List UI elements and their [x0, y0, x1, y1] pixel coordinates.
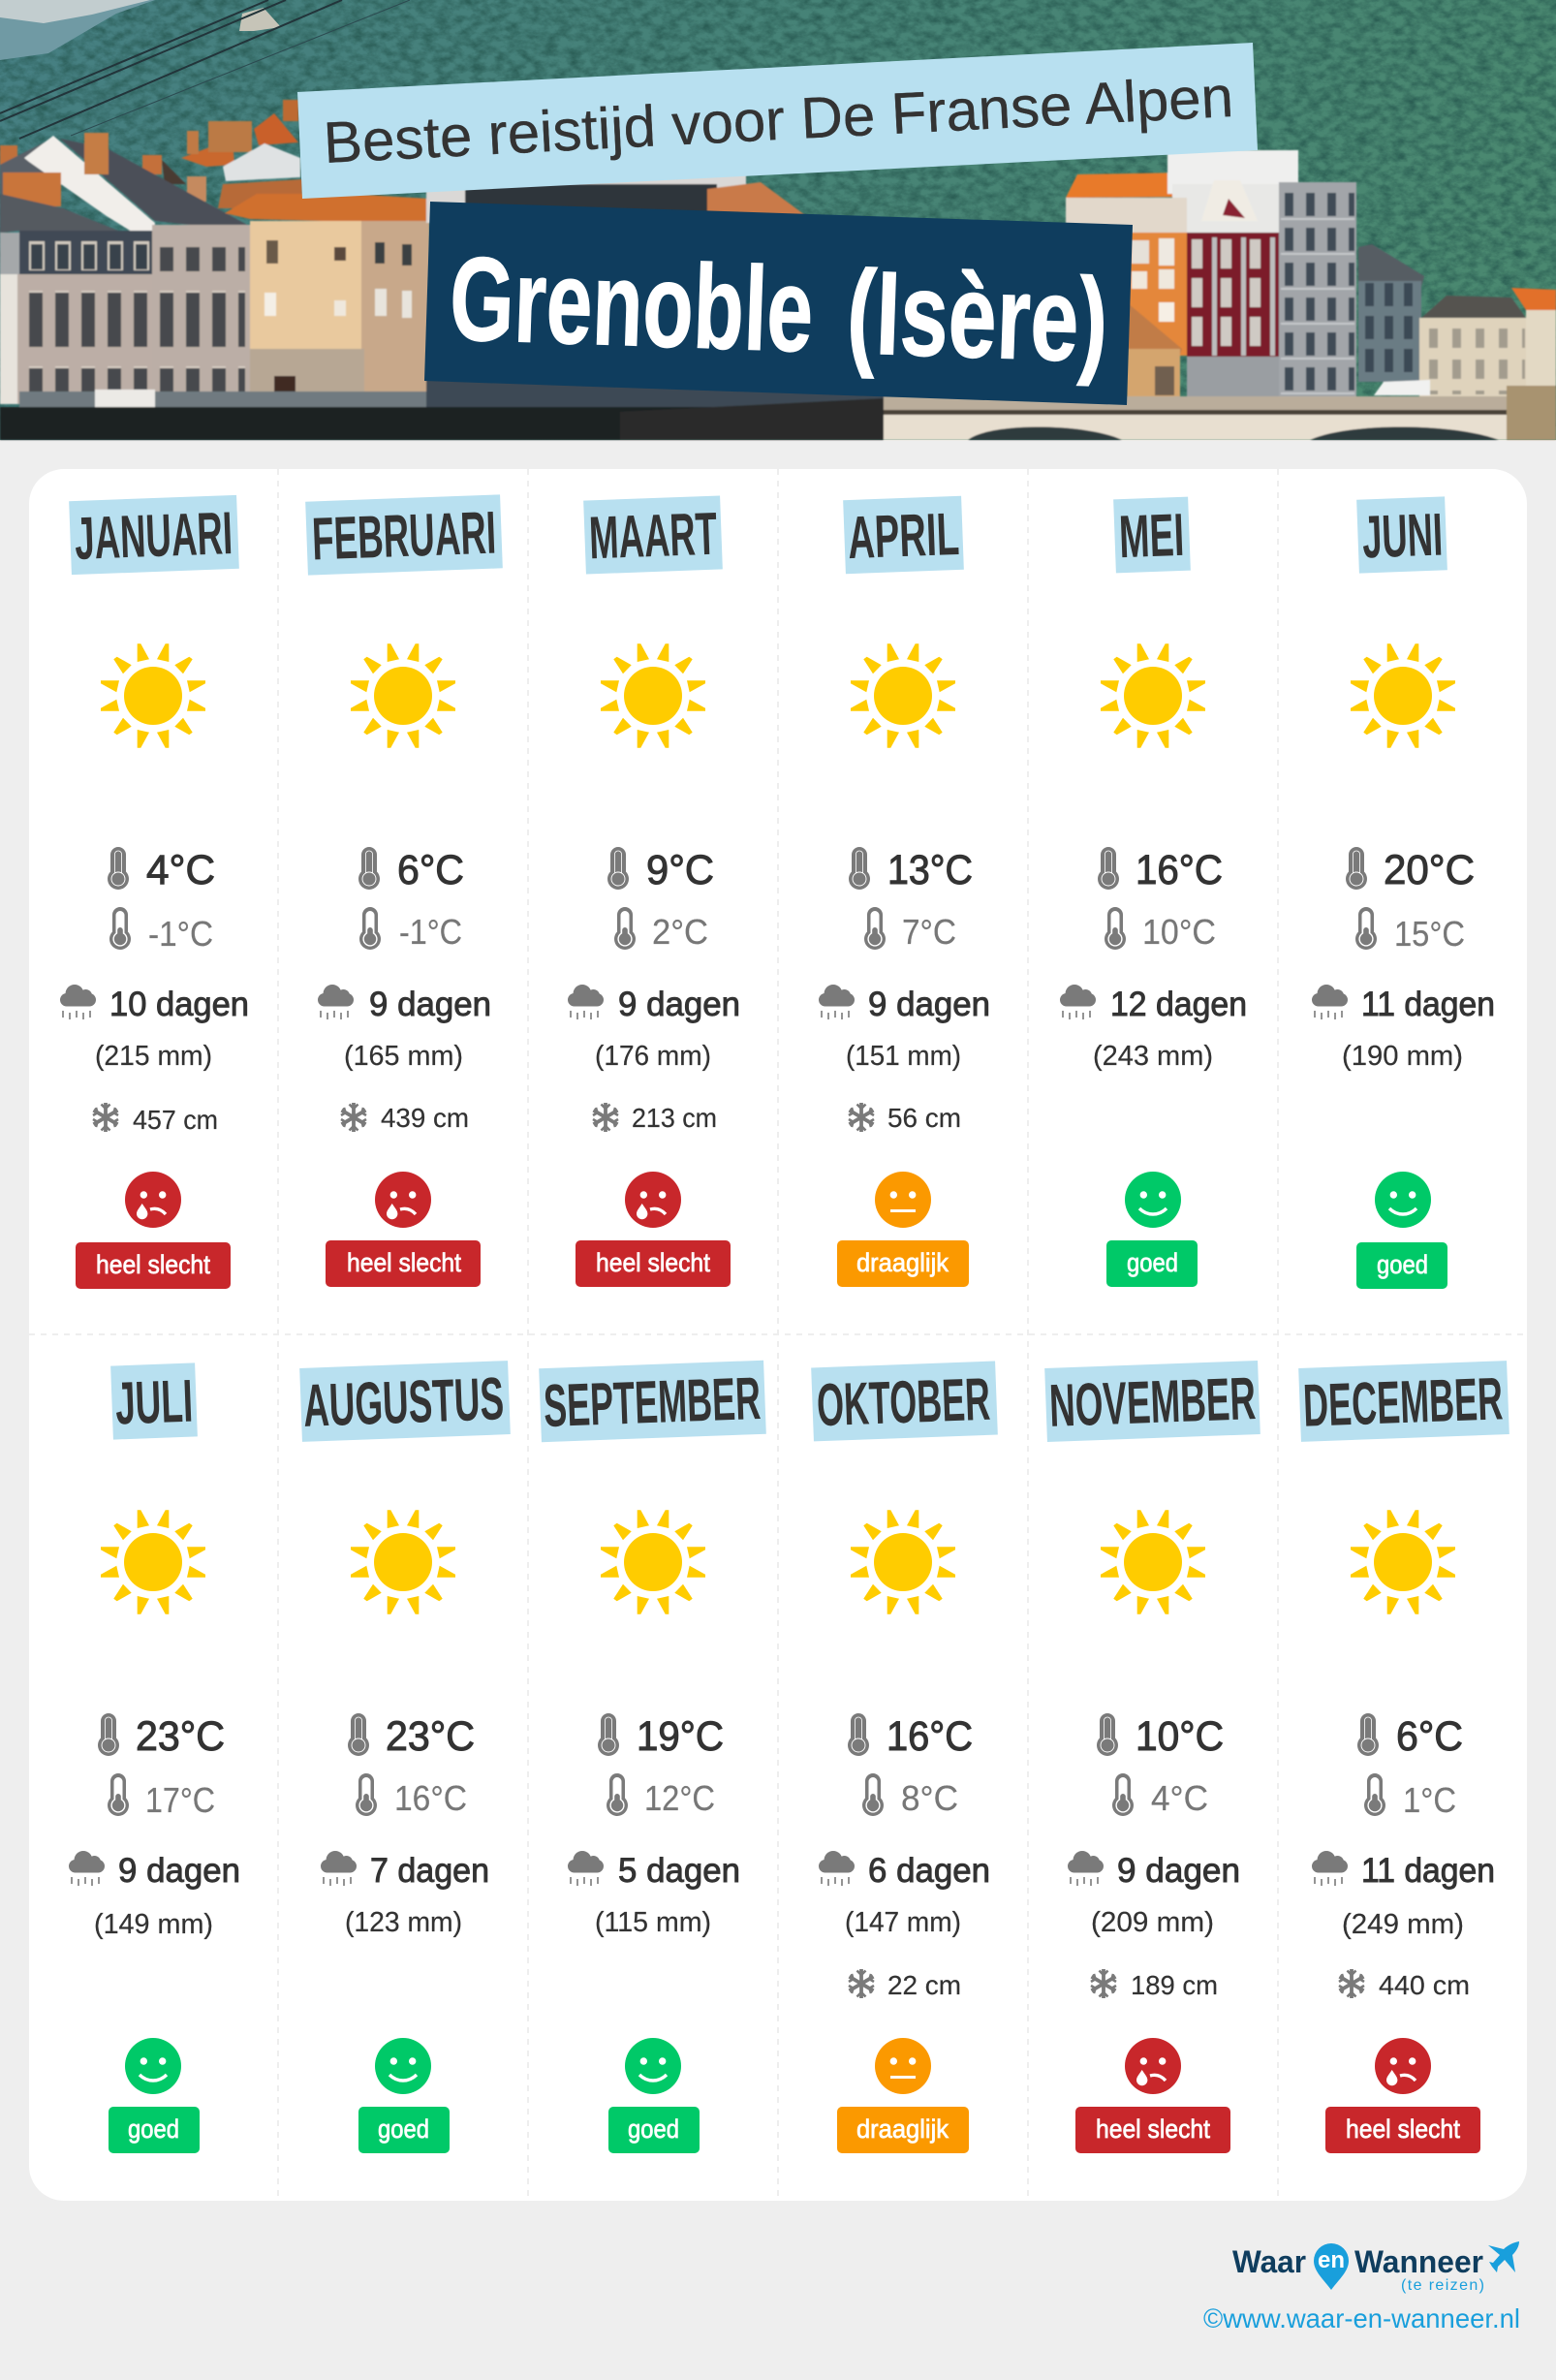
icon: sun — [1351, 643, 1455, 748]
month: mei — [1060, 497, 1247, 1287]
icon: rain cloud — [1312, 985, 1348, 1019]
logo: Waar en Wanneer: en — [1318, 2247, 1345, 2273]
max temperature: 6°C — [1396, 1713, 1463, 1760]
icon: rain cloud — [1060, 985, 1096, 1019]
rating badge: heel slecht — [596, 1248, 710, 1277]
icon: sun — [101, 1510, 205, 1614]
rating badge — [576, 1240, 731, 1287]
rating badge — [1356, 1242, 1447, 1289]
rating badge — [837, 2107, 969, 2153]
icon: sun — [1351, 1510, 1455, 1614]
rain days: 11 dagen — [1361, 986, 1495, 1023]
icon: neutral face — [875, 1172, 931, 1228]
snowfall: 22 cm — [887, 1970, 961, 2000]
rain days: 11 dagen — [1361, 1852, 1495, 1890]
icon: thermometer min — [1355, 907, 1377, 950]
snowfall: 439 cm — [381, 1103, 469, 1133]
rating badge — [109, 2107, 200, 2153]
heading: juli — [110, 1362, 198, 1440]
icon: map pin — [1314, 2243, 1349, 2290]
rating badge: goed — [128, 2114, 179, 2144]
icon: crying face — [1375, 2038, 1431, 2094]
icon: happy face — [625, 2038, 681, 2094]
heading: april: APRIL — [847, 501, 960, 572]
icon: rain cloud — [60, 985, 96, 1019]
heading: februari: FEBRUARI — [311, 500, 497, 573]
rating badge: heel slecht — [1346, 2114, 1460, 2144]
rainfall: (243 mm) — [1093, 1041, 1213, 1072]
rain days: 7 dagen — [370, 1852, 489, 1890]
rain days: 10 dagen — [109, 986, 249, 1023]
max temperature: 13°C — [887, 847, 973, 893]
heading: maart: MAART — [588, 501, 718, 572]
snowfall: 213 cm — [632, 1103, 717, 1133]
icon: crying face — [625, 1172, 681, 1228]
heading: november — [1044, 1361, 1260, 1442]
rainfall: (249 mm) — [1342, 1909, 1464, 1940]
max temperature: 4°C — [146, 847, 215, 893]
min temperature: 17°C — [145, 1780, 215, 1820]
icon: sun — [851, 643, 955, 748]
heading: juni — [1356, 496, 1447, 574]
min temperature: 15°C — [1394, 914, 1465, 954]
rainfall: (176 mm) — [595, 1041, 711, 1072]
icon: thermometer max — [1098, 847, 1119, 890]
logo: Waar en Wanneer: (te reizen) — [1401, 2277, 1484, 2294]
snowfall: 457 cm — [133, 1105, 218, 1135]
heading: september: SEPTEMBER — [543, 1365, 762, 1440]
heading: mei: MEI — [1118, 502, 1185, 571]
rating badge: goed — [628, 2114, 679, 2144]
icon: thermometer max — [598, 1713, 619, 1756]
snowfall: 56 cm — [887, 1103, 961, 1133]
icon: sun — [601, 1510, 705, 1614]
heading: juli: JULI — [114, 1368, 194, 1437]
icon: snowflake — [341, 1103, 366, 1132]
heading: november: NOVEMBER — [1048, 1365, 1257, 1440]
icon: sun — [601, 643, 705, 748]
icon: sun — [851, 1510, 955, 1614]
heading: augustus: AUGUSTUS — [302, 1365, 505, 1440]
logo: Waar en Wanneer: Wanneer — [1354, 2244, 1483, 2279]
icon: sun — [1101, 1510, 1205, 1614]
heading: oktober: OKTOBER — [816, 1366, 991, 1439]
heading: juni: JUNI — [1361, 501, 1444, 571]
icon: thermometer min — [109, 907, 131, 950]
icon: thermometer max — [1097, 1713, 1118, 1756]
rain days: 12 dagen — [1110, 986, 1247, 1023]
max temperature: 16°C — [1136, 847, 1223, 893]
icon: thermometer min — [614, 907, 636, 950]
icon: happy face — [375, 2038, 431, 2094]
rating badge — [837, 1240, 969, 1287]
rainfall: (123 mm) — [345, 1907, 462, 1938]
max temperature: 23°C — [136, 1713, 225, 1760]
title banner: Beste reistijd voor De Franse Alpen — [297, 43, 1258, 199]
heading: oktober — [811, 1362, 998, 1441]
icon: thermometer min — [1112, 1773, 1134, 1816]
panel: monthly climate card — [29, 469, 1527, 2201]
icon: thermometer max — [848, 1713, 869, 1756]
min temperature: 10°C — [1142, 912, 1216, 952]
heading: maart — [583, 495, 723, 575]
rating badge — [608, 2107, 700, 2153]
icon: thermometer max — [1346, 847, 1367, 890]
month: oktober — [811, 1362, 998, 2153]
rainfall: (149 mm) — [94, 1909, 213, 1940]
month: januari — [60, 495, 249, 1289]
month: september — [539, 1361, 766, 2153]
logo: Waar en Wanneer — [1232, 2241, 1519, 2294]
icon: thermometer max — [348, 1713, 369, 1756]
min temperature: 12°C — [644, 1778, 715, 1818]
snowfall: 440 cm — [1379, 1970, 1470, 2000]
icon: snowflake — [1091, 1969, 1116, 1998]
icon: thermometer min — [356, 1773, 377, 1816]
icon: thermometer min — [108, 1773, 129, 1816]
rating badge — [1075, 2107, 1230, 2153]
icon: thermometer min — [359, 907, 381, 950]
icon: snowflake — [849, 1969, 874, 1998]
icon: thermometer max — [98, 1713, 119, 1756]
rainfall: (147 mm) — [845, 1907, 961, 1938]
icon: thermometer max — [607, 847, 629, 890]
rain days: 9 dagen — [868, 986, 990, 1023]
min temperature: -1°C — [148, 914, 213, 954]
min temperature: 7°C — [902, 912, 956, 952]
icon: rain cloud — [1312, 1851, 1348, 1886]
heading banner: Grenoble (Isère) — [424, 202, 1133, 405]
rain days: 9 dagen — [1117, 1852, 1240, 1890]
icon: rain cloud — [321, 1851, 357, 1886]
rainfall: (209 mm) — [1091, 1907, 1214, 1938]
icon: thermometer min — [607, 1773, 628, 1816]
max temperature: 19°C — [637, 1713, 724, 1760]
rainfall: (115 mm) — [595, 1907, 711, 1938]
rating badge: heel slecht — [347, 1248, 461, 1277]
icon: crying face — [1125, 2038, 1181, 2094]
icon: airplane — [1488, 2241, 1519, 2272]
icon: rain cloud — [69, 1851, 105, 1886]
icon: sun — [351, 643, 455, 748]
icon: thermometer min — [864, 907, 886, 950]
logo: Waar en Wanneer: Waar — [1232, 2244, 1306, 2279]
icon: thermometer min — [1105, 907, 1126, 950]
max temperature: 10°C — [1136, 1713, 1224, 1760]
icon: snowflake — [1339, 1969, 1364, 1998]
icon: rain cloud — [568, 1851, 604, 1886]
icon: rain cloud — [568, 985, 604, 1019]
heading: januari: JANUARI — [74, 500, 233, 573]
icon: sun — [101, 643, 205, 748]
icon: snowflake — [593, 1103, 618, 1132]
rating badge: goed — [1377, 1250, 1428, 1279]
icon: crying face — [125, 1172, 181, 1228]
icon: rain cloud — [1068, 1851, 1104, 1886]
icon: happy face — [125, 2038, 181, 2094]
max temperature: 16°C — [887, 1713, 973, 1760]
icon: rain cloud — [819, 985, 855, 1019]
heading: februari — [305, 494, 503, 576]
website url: ©www.waar-en-wanneer.nl — [1203, 2303, 1520, 2333]
icon: sun — [351, 1510, 455, 1614]
icon: happy face — [1375, 1172, 1431, 1228]
max temperature: 6°C — [397, 847, 464, 893]
icon: neutral face — [875, 2038, 931, 2094]
icon: crying face — [375, 1172, 431, 1228]
rating badge: goed — [1127, 1248, 1178, 1277]
rainfall: (215 mm) — [95, 1041, 212, 1072]
icon: rain cloud — [819, 1851, 855, 1886]
rating badge — [1325, 2107, 1480, 2153]
rating badge — [358, 2107, 450, 2153]
min temperature: 2°C — [652, 912, 708, 952]
min temperature: 8°C — [901, 1778, 958, 1818]
icon: thermometer max — [849, 847, 870, 890]
month: juli — [69, 1362, 240, 2153]
icon: thermometer min — [1364, 1773, 1385, 1816]
icon: thermometer max — [1357, 1713, 1379, 1756]
max temperature: 20°C — [1384, 847, 1475, 893]
icon: sun — [1101, 643, 1205, 748]
icon: snowflake — [93, 1103, 118, 1132]
rainfall: (151 mm) — [846, 1041, 961, 1072]
rating badge: heel slecht — [96, 1250, 210, 1279]
min temperature: 4°C — [1151, 1778, 1208, 1818]
heading: augustus — [299, 1361, 511, 1442]
rainfall: (190 mm) — [1342, 1041, 1463, 1072]
rating badge: goed — [378, 2114, 429, 2144]
month: februari — [305, 494, 503, 1287]
heading: september — [539, 1361, 766, 1442]
max temperature: 23°C — [386, 1713, 475, 1760]
heading banner: Grenoble (Isère): Grenoble — [448, 233, 816, 378]
heading: mei — [1113, 497, 1191, 573]
rating badge: draaglijk — [856, 1248, 949, 1277]
month: augustus — [299, 1361, 511, 2153]
min temperature: 16°C — [394, 1778, 467, 1818]
min temperature: -1°C — [399, 912, 462, 952]
month: november — [1044, 1361, 1260, 2153]
rain days: 9 dagen — [618, 986, 740, 1023]
title banner: Beste reistijd voor De Franse Alpen: Beste reistijd voor De Franse Alpen — [322, 64, 1234, 175]
rating badge: draaglijk — [856, 2114, 949, 2144]
rain days: 5 dagen — [618, 1852, 740, 1890]
icon: thermometer min — [862, 1773, 884, 1816]
rating badge: heel slecht — [1096, 2114, 1210, 2144]
rain days: 9 dagen — [118, 1852, 240, 1890]
heading banner: Grenoble (Isère): (Isère) — [845, 246, 1110, 388]
rain days: 9 dagen — [369, 986, 491, 1023]
rain days: 6 dagen — [868, 1852, 990, 1890]
min temperature: 1°C — [1403, 1780, 1456, 1820]
heading: januari — [69, 495, 239, 575]
icon: thermometer max — [358, 847, 380, 890]
icon: thermometer max — [108, 847, 129, 890]
month: december — [1298, 1361, 1509, 2153]
heading: april — [843, 496, 964, 574]
rating badge — [76, 1242, 231, 1289]
month: maart — [568, 495, 740, 1287]
header photo: Grenoble city and mountains — [0, 0, 1556, 440]
max temperature: 9°C — [646, 847, 714, 893]
rating badge — [1106, 1240, 1198, 1287]
month: juni — [1312, 496, 1495, 1289]
rating badge — [326, 1240, 481, 1287]
month: april — [819, 496, 990, 1287]
icon: rain cloud — [318, 985, 354, 1019]
icon: happy face — [1125, 1172, 1181, 1228]
rainfall: (165 mm) — [344, 1041, 463, 1072]
snowfall: 189 cm — [1131, 1970, 1218, 2000]
icon: snowflake — [849, 1103, 874, 1132]
